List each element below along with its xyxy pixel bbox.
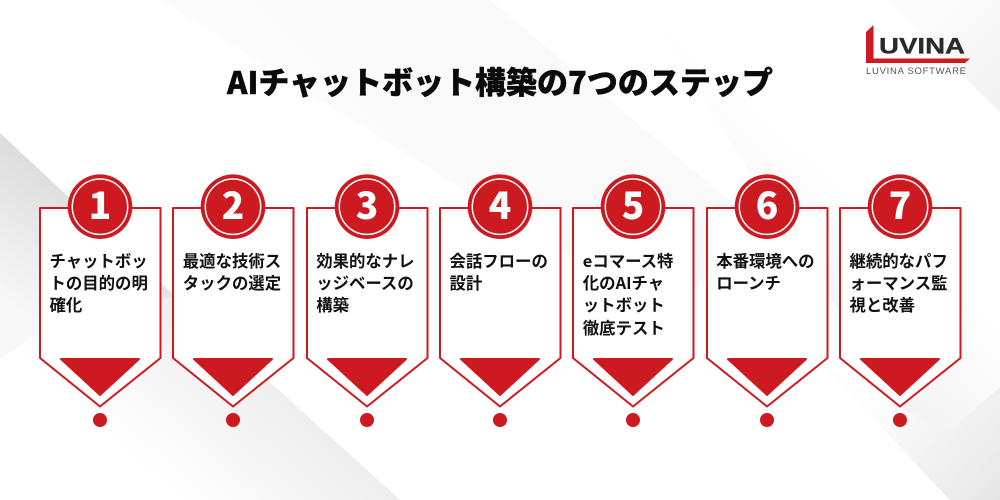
step 5 card: 化のAIチャ [583,270,664,294]
step 3 card [306,174,428,427]
step 4 card: 4 [489,176,511,230]
logo: Luvina Software: UVINA [879,34,965,58]
step 7 card: 視と改善 [850,292,915,316]
step 2 card [172,174,294,427]
step 3 card: 構築 [316,292,349,316]
step 7 card [839,174,962,427]
step 3 card: 効果的なナレ [316,248,415,272]
step 1 card: 確化 [50,292,82,316]
step 7 card: ォーマンス監 [850,270,948,294]
step 7 card: 継続的なパフ [850,248,948,272]
step 6 card: 6 [755,176,778,230]
step 5 card: 5 [622,176,645,230]
step 2 card: 2 [222,176,245,230]
step 4 card: 設計 [450,270,482,294]
step 5 card [572,174,694,427]
logo: Luvina Software: LUVINA SOFTWARE [866,66,966,77]
step 1 card: トの目的の明 [50,270,148,294]
step 7 card: 7 [889,176,911,230]
logo: Luvina Software [866,25,970,77]
step 1 card [39,174,162,427]
step 6 card: ローンチ [716,270,781,294]
step 3 card: ッジベースの [316,270,414,294]
step 5 card: ットボット [583,292,665,316]
step 1 card: 1 [89,176,111,230]
title: AIチャットボット構築の7つのステップ [227,58,773,103]
step 1 card: チャットボッ [50,248,148,272]
step 4 card: 会話フローの [450,248,548,272]
step 2 card: タックの選定 [183,270,281,294]
step 2 card: 最適な技術ス [183,248,281,272]
step 5 card: 徹底テスト [583,315,665,339]
step 6 card [706,174,828,427]
step 6 card: 本番環境への [716,248,815,272]
step 3 card: 3 [355,176,378,230]
step 4 card [439,174,562,427]
step 5 card: eコマース特 [583,248,673,272]
